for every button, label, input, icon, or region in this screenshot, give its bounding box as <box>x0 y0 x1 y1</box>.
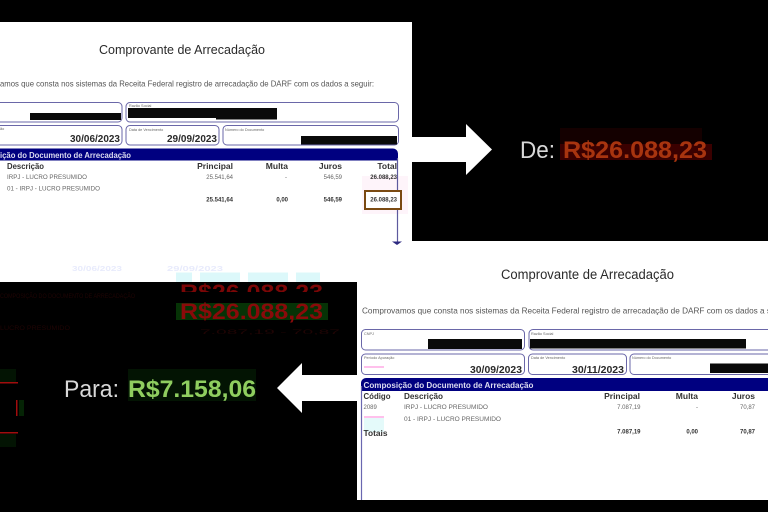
ghost value: R$26.088,23 <box>180 280 323 305</box>
table rows: 25.541,64 <box>206 198 234 204</box>
dates <box>70 133 217 145</box>
field labels: CNPJ <box>364 332 374 336</box>
table rows: 7.087,19 <box>617 430 641 436</box>
table rows: 70,87 <box>740 430 756 436</box>
value glow <box>560 128 712 160</box>
ghost table text <box>0 291 341 336</box>
table end marker <box>392 242 402 245</box>
column headers: Principal <box>604 391 640 401</box>
table rows: 0,00 <box>686 430 699 436</box>
receipt title: Comprovante de Arrecadação <box>99 42 265 57</box>
ghost value: R$26.088,23 <box>180 299 323 324</box>
column headers <box>364 391 755 438</box>
column headers: Código <box>364 391 390 401</box>
dates: 29/09/2023 <box>167 133 217 145</box>
ghost table text: 7.087,19 - 70,87 <box>200 329 341 336</box>
table rows: 26.088,23 <box>370 175 398 181</box>
field labels: Número do Documento <box>225 128 264 132</box>
label: after value: R$7.158,06 <box>128 376 256 403</box>
table rows: 546,59 <box>324 175 343 181</box>
table header band <box>361 378 768 391</box>
ghost value <box>176 283 328 322</box>
column headers: Multa <box>676 391 698 401</box>
column headers: Juros <box>319 161 342 171</box>
ghost artefacts on white <box>72 264 320 282</box>
pink highlight <box>362 176 408 214</box>
highlighted total box: 26.088,23 <box>370 198 398 204</box>
field labels <box>364 332 671 360</box>
table rows: - <box>696 405 698 411</box>
highlighted total box <box>365 191 401 209</box>
pink mark <box>364 366 384 368</box>
table rows: 25.541,64 <box>206 175 234 181</box>
panel: original receipt <box>0 22 768 282</box>
field labels: ão <box>0 127 4 131</box>
ghost artefacts on white: 30/06/2023 <box>72 264 122 273</box>
redactions <box>428 339 768 373</box>
table rows: 2089 <box>364 405 378 411</box>
left table border <box>360 386 362 500</box>
column headers: Multa <box>266 161 288 171</box>
label: before value: R$26.088,23 <box>563 137 707 164</box>
field labels: Data de Vencimento <box>531 356 565 360</box>
column headers: Principal <box>197 161 233 171</box>
redactions <box>30 108 397 144</box>
table rows: 0,00 <box>276 198 289 204</box>
ghost table text: COMPOSIÇÃO DO DOCUMENTO DE ARRECADAÇÃO <box>0 291 135 300</box>
column headers <box>7 161 397 171</box>
table header band <box>0 148 398 160</box>
column headers: Descrição <box>404 391 443 401</box>
intro text: amos que consta nos sistemas da Receita Federal registro de arrecadação de DARF com os dados a seguir: <box>0 78 374 88</box>
table rows <box>7 175 398 204</box>
taxpayer fields <box>362 330 768 374</box>
field labels: Número do Documento <box>632 356 671 360</box>
table header text: ição do Documento de Arrecadação <box>0 151 131 160</box>
label: before value: De: <box>520 137 555 164</box>
table rows: - <box>285 175 287 181</box>
table rows: IRPJ - LUCRO PRESUMIDO <box>404 405 488 411</box>
right table border <box>396 158 398 242</box>
taxpayer fields <box>0 102 398 145</box>
column headers: Total <box>377 161 397 171</box>
value glow <box>128 369 256 401</box>
table rows <box>364 405 756 436</box>
field labels: Data de Vencimento <box>129 128 163 132</box>
label: after value: Para: <box>64 376 119 403</box>
ghost table text: LUCRO PRESUMIDO <box>0 325 70 332</box>
table rows: 546,59 <box>324 198 343 204</box>
dates: 30/06/2023 <box>70 133 120 145</box>
column headers: Juros <box>732 391 755 401</box>
panel: lower left dark area <box>0 283 339 447</box>
dates: 30/11/2023 <box>572 364 624 376</box>
label: before value <box>520 128 712 164</box>
dates: 30/09/2023 <box>470 364 522 376</box>
cyan artefact <box>364 418 384 432</box>
pink mark lower <box>364 416 384 418</box>
dates <box>470 364 624 376</box>
red marks <box>0 369 24 447</box>
field labels: Razão Social <box>531 332 554 336</box>
ghost artefacts on white: 29/09/2023 <box>167 264 223 273</box>
column headers: Totais <box>364 428 388 438</box>
table rows: IRPJ - LUCRO PRESUMIDO <box>7 175 87 181</box>
panel: amended receipt <box>357 267 768 500</box>
table rows: 01 - IRPJ - LUCRO PRESUMIDO <box>7 186 100 192</box>
field labels <box>0 104 264 132</box>
arrow: left <box>277 363 357 413</box>
arrow: right <box>412 124 492 175</box>
table rows: 01 - IRPJ - LUCRO PRESUMIDO <box>404 417 501 423</box>
column headers: Descrição <box>7 161 44 171</box>
field labels: Período Apuração <box>364 356 394 360</box>
receipt title: Comprovante de Arrecadação <box>501 267 674 282</box>
table rows: 7.087,19 <box>617 405 641 411</box>
label: after value <box>64 369 256 403</box>
table header text: Composição do Documento de Arrecadação <box>364 380 534 390</box>
field labels: Razão Social <box>129 104 152 108</box>
table rows: 70,87 <box>740 405 756 411</box>
